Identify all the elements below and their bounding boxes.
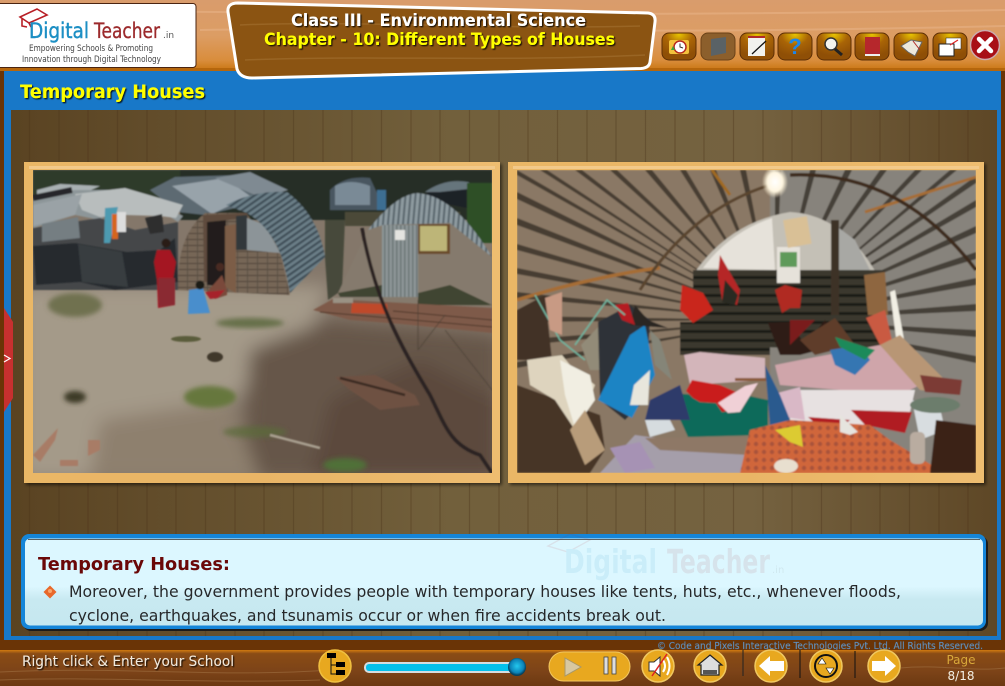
page number: 8/18 xyxy=(948,669,974,683)
separator xyxy=(854,651,856,678)
icon: timer folder xyxy=(662,33,696,60)
icon: back arrow xyxy=(755,650,787,682)
page label: Page xyxy=(946,653,976,667)
logo wordmark teacher: Teacher xyxy=(93,19,160,43)
separator xyxy=(742,650,744,676)
logo tagline second line: Innovation through Digital Technology xyxy=(22,55,161,65)
play pause control xyxy=(549,652,630,681)
progress slider xyxy=(364,658,526,676)
icon: next arrow xyxy=(868,650,900,682)
title line 1: Class III - Environmental Science xyxy=(291,11,586,30)
wooden content panel xyxy=(11,110,997,636)
icon: diamond bullet xyxy=(44,586,56,598)
icon: close button xyxy=(970,30,1000,60)
icon: magnifier xyxy=(817,33,851,60)
tab arrow xyxy=(4,355,10,362)
separator xyxy=(799,650,801,678)
text box xyxy=(21,534,988,631)
photo frame: temporary huts exterior xyxy=(20,162,500,483)
icon: home xyxy=(694,650,726,682)
icon: help question mark xyxy=(778,33,812,60)
bottom wooden bar xyxy=(0,650,1005,686)
icon: refresh xyxy=(810,650,842,682)
icon: graduation cap xyxy=(20,9,47,27)
icon: sound muted xyxy=(642,650,674,682)
section heading: Temporary Houses xyxy=(20,82,205,103)
icon: open book xyxy=(894,33,928,60)
photo: interior with corrugated sheet roof xyxy=(517,166,976,473)
left side tab xyxy=(4,308,13,412)
logo card xyxy=(0,4,196,68)
bullet text line 1: Moreover, the government provides people with temporary houses like tents, huts, etc., whenever floods, xyxy=(69,582,901,601)
icon: contents tree xyxy=(319,650,351,682)
watermark: .in xyxy=(772,565,784,576)
icon: reference book xyxy=(701,33,735,60)
photo frame: inside a temporary house xyxy=(508,162,984,483)
photo: huts in a camp xyxy=(20,170,500,480)
icon: help question mark: ? xyxy=(788,34,802,59)
toolbar icons xyxy=(662,30,1000,60)
title plaque xyxy=(228,3,655,78)
watermark: Teacher xyxy=(667,542,771,581)
bullet text line 2: cyclone, earthquakes, and tsunamis occur or when fire accidents break out. xyxy=(69,606,666,625)
box heading: Temporary Houses: xyxy=(38,554,230,575)
logo tagline: Empowering Schools & Promoting xyxy=(29,44,153,54)
logo domain: .in xyxy=(163,31,174,41)
top wooden header bar xyxy=(0,0,1005,71)
icon: notepad xyxy=(740,33,774,60)
icon: window resize xyxy=(933,33,967,60)
icon: dictionary xyxy=(855,33,889,60)
school prompt: Right click & Enter your School xyxy=(22,654,234,670)
watermark xyxy=(548,534,784,581)
title line 2: Chapter - 10: Different Types of Houses xyxy=(264,30,615,49)
logo wordmark: Digital xyxy=(29,19,89,43)
watermark: Digital xyxy=(564,542,657,581)
